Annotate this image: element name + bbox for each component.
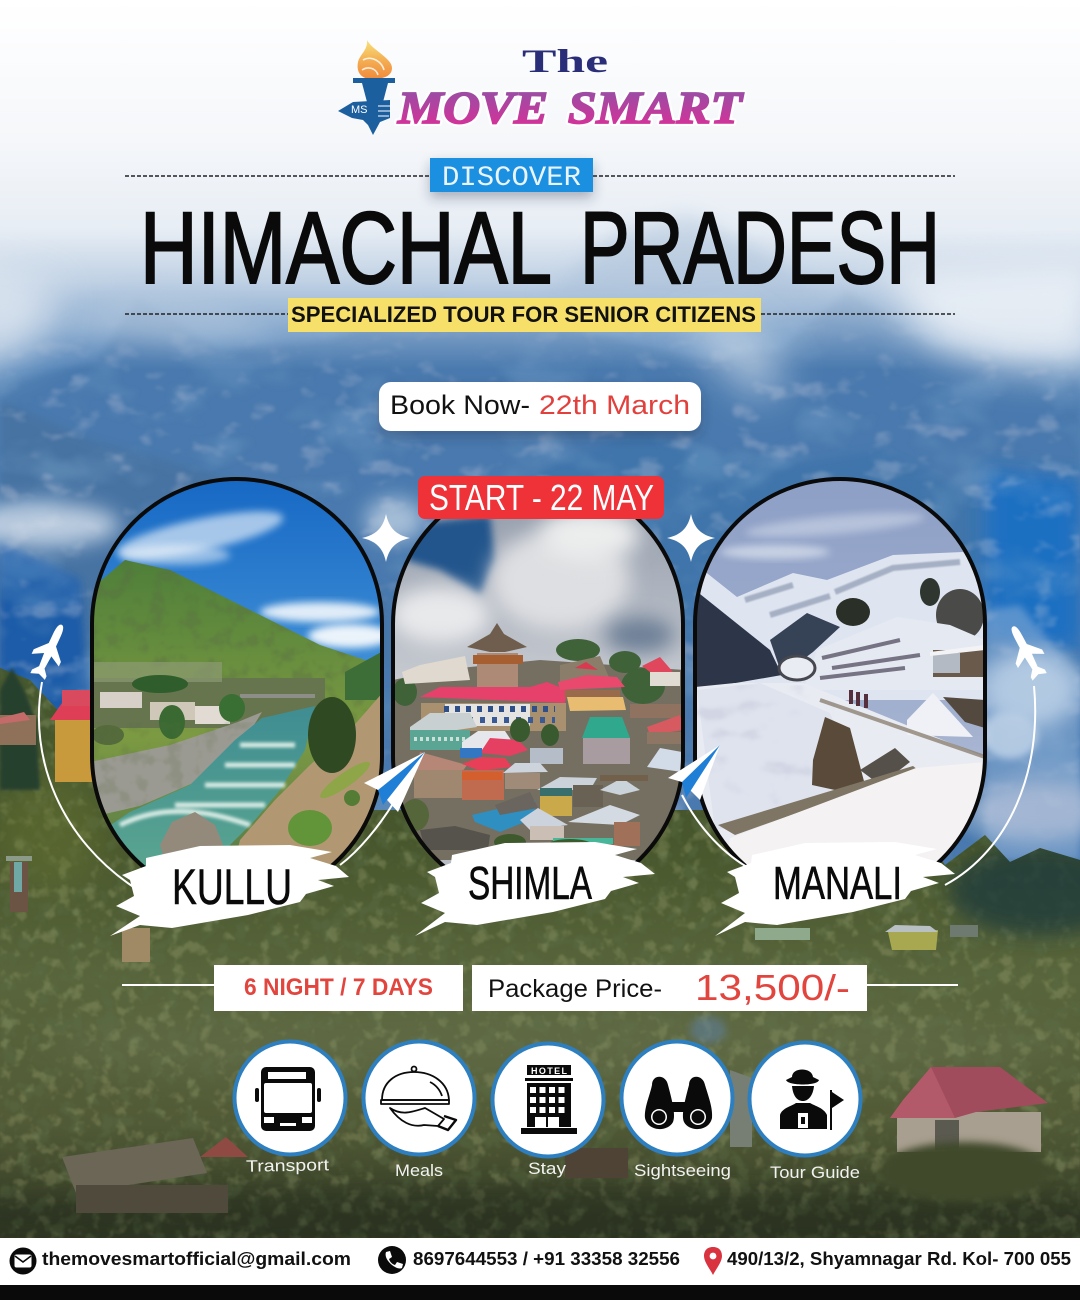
main title: HIMACHAL: [140, 191, 552, 305]
brush label: Kullu: [110, 845, 349, 936]
start date badge: START - 22 MAY: [429, 477, 654, 518]
sparkle star right: [667, 514, 715, 562]
feature: stay: [492, 1044, 604, 1178]
torch icon: [338, 40, 395, 135]
logo: [338, 40, 744, 135]
lower right red roof house: [880, 1067, 1050, 1202]
feature: meals: Meals: [395, 1162, 443, 1180]
icon: binoculars: [645, 1077, 712, 1129]
email contact: [10, 1248, 351, 1274]
discover heading with dashed rule: [125, 158, 955, 194]
booking date pill: 22th March: [539, 390, 690, 420]
address contact: 490/13/2, Shyamnagar Rd. Kol- 700 055: [727, 1248, 1071, 1269]
photo arch: Shimla: [391, 519, 685, 867]
feature: sightseeing: [622, 1042, 732, 1180]
move smart wordmark: MOVE: [397, 82, 548, 133]
booking date pill: [379, 382, 701, 431]
subtitle banner: [125, 298, 955, 332]
airplane right: [1000, 619, 1053, 684]
feature: sightseeing: Sightseeing: [634, 1162, 731, 1180]
main title: [140, 191, 940, 305]
feature: meals: [364, 1042, 474, 1180]
photo arch: Kullu: [90, 477, 384, 868]
icon: hotel: HOTEL: [531, 1066, 568, 1076]
photo arch: Manali: [693, 478, 990, 903]
feature: stay: Stay: [528, 1160, 567, 1178]
left yellow house: [0, 690, 93, 782]
right hill cottages: [755, 925, 978, 950]
main title: PRADESH: [580, 191, 940, 305]
paper plane: Shimla to Manali: [668, 745, 720, 800]
brush label: Shimla: [415, 842, 655, 936]
phone contact: [378, 1246, 680, 1274]
sparkle star left: [362, 514, 410, 562]
brush label: Manali: MANALI: [773, 857, 902, 909]
brush label: Kullu: KULLU: [172, 859, 292, 915]
move smart wordmark: [397, 82, 744, 133]
airplane left: [24, 618, 75, 683]
phone contact: 8697644553 / +91 33358 32556: [413, 1248, 680, 1269]
icon: cloche and hand: [381, 1066, 456, 1130]
subtitle banner: SPECIALIZED TOUR FOR SENIOR CITIZENS: [291, 302, 756, 327]
temple tower: [402, 623, 610, 689]
icon: guide with flag: [780, 1070, 844, 1130]
package price box: Package Price-: [488, 975, 662, 1003]
small white building: [122, 928, 150, 962]
icon: bus: [255, 1067, 321, 1131]
feature: tour guide: [750, 1042, 860, 1182]
move smart wordmark: SMART: [568, 82, 744, 133]
move smart wordmark: SMART: [568, 82, 744, 133]
center wooden structure: [565, 1070, 752, 1178]
the: The: [522, 44, 608, 80]
brush label: Manali: [715, 842, 955, 936]
duration box: [122, 965, 463, 1011]
forest hillside: [0, 660, 1080, 1243]
email contact: themovesmartofficial@gmail.com: [42, 1248, 351, 1269]
small tower: [6, 856, 32, 912]
feature: transport: [234, 1042, 346, 1176]
town buildings: [401, 657, 684, 851]
lower left wooden cabin: [62, 1137, 248, 1213]
discover heading with dashed rule: DISCOVER: [442, 163, 581, 194]
move smart wordmark: MOVE: [397, 82, 548, 133]
contact footer bar: [0, 1238, 1080, 1300]
package price box: [472, 965, 958, 1011]
package price box: 13,500/-: [695, 967, 850, 1008]
brush label: Shimla: SHIMLA: [468, 857, 592, 909]
route arrows: [39, 682, 1035, 888]
paper plane: Kullu to Shimla: [364, 752, 425, 812]
address contact: [704, 1247, 1071, 1275]
booking date pill: Book Now-: [390, 390, 530, 420]
trees behind town: [393, 639, 665, 706]
feature: transport: Transport: [246, 1156, 330, 1176]
feature: tour guide: Tour Guide: [770, 1164, 860, 1182]
torch icon: MS: [351, 104, 368, 116]
duration box: 6 NIGHT / 7 DAYS: [244, 974, 433, 1001]
